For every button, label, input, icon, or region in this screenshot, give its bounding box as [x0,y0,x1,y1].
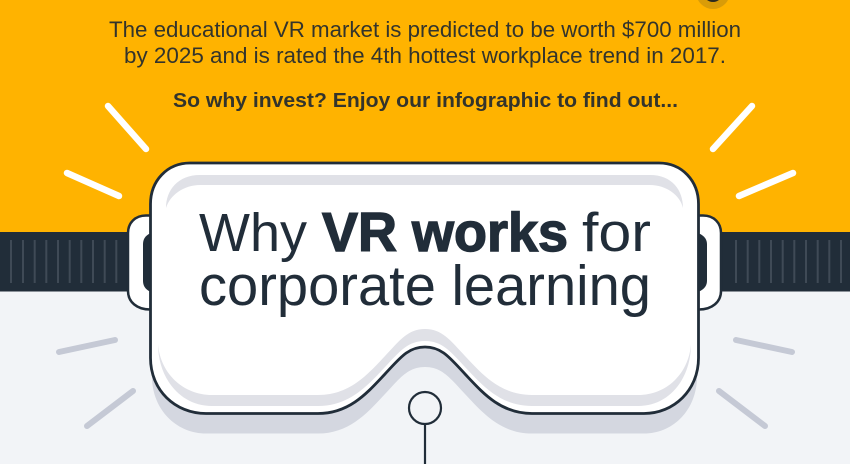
headset visor [150,163,698,414]
visor body outline [150,163,698,414]
title word: for: for [582,201,651,263]
connector circle and line [409,392,441,464]
right ear piece [697,216,721,310]
call to action: So why invest? Enjoy our infographic to find out... [173,90,678,112]
title words: VR works: VR works [322,201,568,263]
visor top inner shade [166,175,683,208]
left headset strap [0,232,135,292]
left ear piece [128,216,152,310]
right headset strap [715,232,850,292]
title line 2: corporate learning [199,254,651,318]
icon: partial circle at top edge [696,0,730,9]
title [199,201,651,318]
panel: pale lower background [0,232,850,464]
headset drop shadow [152,340,697,434]
white rays, upper left and right [67,106,793,196]
visor bottom inner shade [158,329,691,406]
intro line 2: by 2025 and is rated the 4th hottest workplace trend in 2017. [124,43,726,68]
intro text block [109,17,741,112]
title word: Why: Why [199,203,307,263]
grey rays, lower left and right [59,340,792,426]
intro line 1: The educational VR market is predicted to be worth $700 million [109,17,741,42]
panel: yellow upper background [0,0,850,232]
